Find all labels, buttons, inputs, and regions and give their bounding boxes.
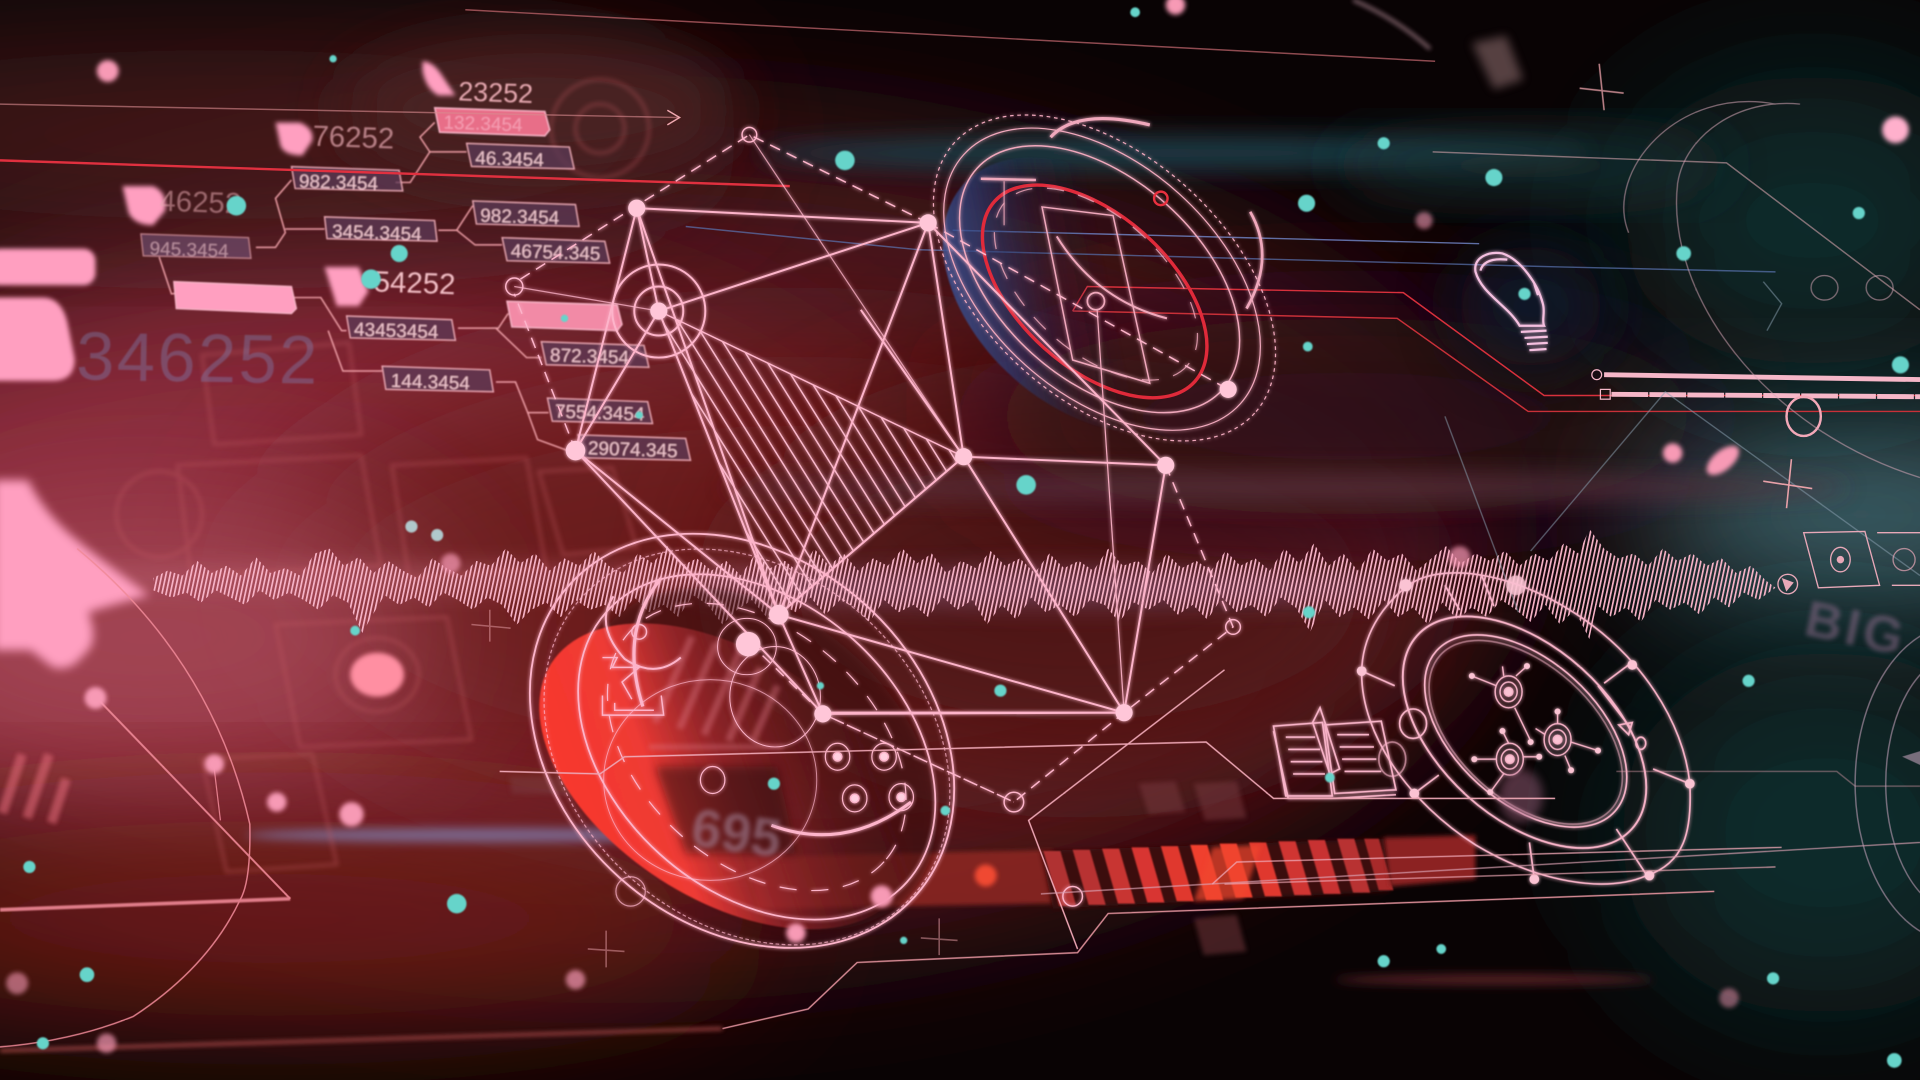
crosses [471, 64, 1812, 967]
connector lines [159, 122, 578, 454]
disc shade [515, 519, 1004, 999]
icon: lightbulb [1475, 253, 1548, 350]
molecule hubs [1469, 663, 1601, 795]
bottom right radial disc [1357, 572, 1695, 893]
bottom red status bar [747, 835, 1476, 909]
label values: 132.3454 [443, 113, 523, 136]
nodes [566, 200, 1237, 722]
highlighted boxes [174, 108, 622, 331]
target rings [634, 287, 683, 336]
solid edges [576, 208, 1166, 714]
dark screen panel [655, 767, 796, 853]
right progress bars [1592, 370, 1920, 436]
big numbers: 46252 [159, 185, 242, 220]
pale glow under hubs [1499, 769, 1543, 823]
blurred hatch panel [649, 637, 784, 747]
label values: 945.3454 [149, 239, 229, 262]
label values: 3454.3454 [332, 222, 422, 246]
blurred pink panels left [0, 61, 456, 668]
horizontal accent lines [0, 10, 1920, 411]
left triangle gauge [0, 549, 290, 1047]
red crescent [485, 560, 967, 992]
blue crescent [890, 103, 1283, 488]
faded number on disc: 695 [688, 797, 785, 869]
faded BIG text: BIG [1800, 588, 1912, 666]
frame lines [0, 670, 1920, 1051]
ring nodes [1357, 576, 1695, 884]
blurred background grid panels [116, 80, 649, 872]
rings [1360, 572, 1690, 893]
label values: 144.3454 [390, 371, 470, 395]
red marker [1154, 192, 1168, 205]
big numbers: 23252 [458, 76, 534, 109]
bar stripes [1043, 839, 1393, 906]
icon: open book [1273, 708, 1396, 798]
label values: 872.3454 [550, 345, 629, 369]
label values: 29074.345 [588, 438, 678, 462]
label values [149, 113, 678, 462]
data label tree [141, 76, 691, 462]
waveform [153, 529, 1776, 639]
disc rings [872, 52, 1337, 713]
blurred code block [509, 776, 1247, 955]
label values: 46754.345 [510, 241, 601, 265]
disc rings [446, 449, 1082, 1033]
label values: 982.3454 [480, 206, 560, 229]
big numbers: 76252 [312, 120, 395, 156]
dashed edges [514, 135, 1233, 802]
right square icons [1778, 531, 1920, 594]
open nodes [506, 127, 1240, 812]
label values: 46.3454 [475, 148, 544, 171]
label values: 982.3454 [299, 171, 378, 195]
big numbers: 54252 [373, 265, 456, 301]
red ring [944, 145, 1246, 438]
geometric network [506, 127, 1240, 812]
label boxes [141, 143, 691, 460]
bottom left disc [446, 449, 1082, 1033]
hatched triangle [659, 311, 964, 615]
big numbers [159, 76, 534, 301]
label values: 43453454 [354, 320, 439, 343]
right decorative arcs [1353, 0, 1920, 612]
top right disc [872, 52, 1337, 713]
right edge dial [1855, 624, 1920, 943]
label values: 7554.3454 [555, 402, 645, 426]
large faint number: 346252 [76, 318, 320, 399]
